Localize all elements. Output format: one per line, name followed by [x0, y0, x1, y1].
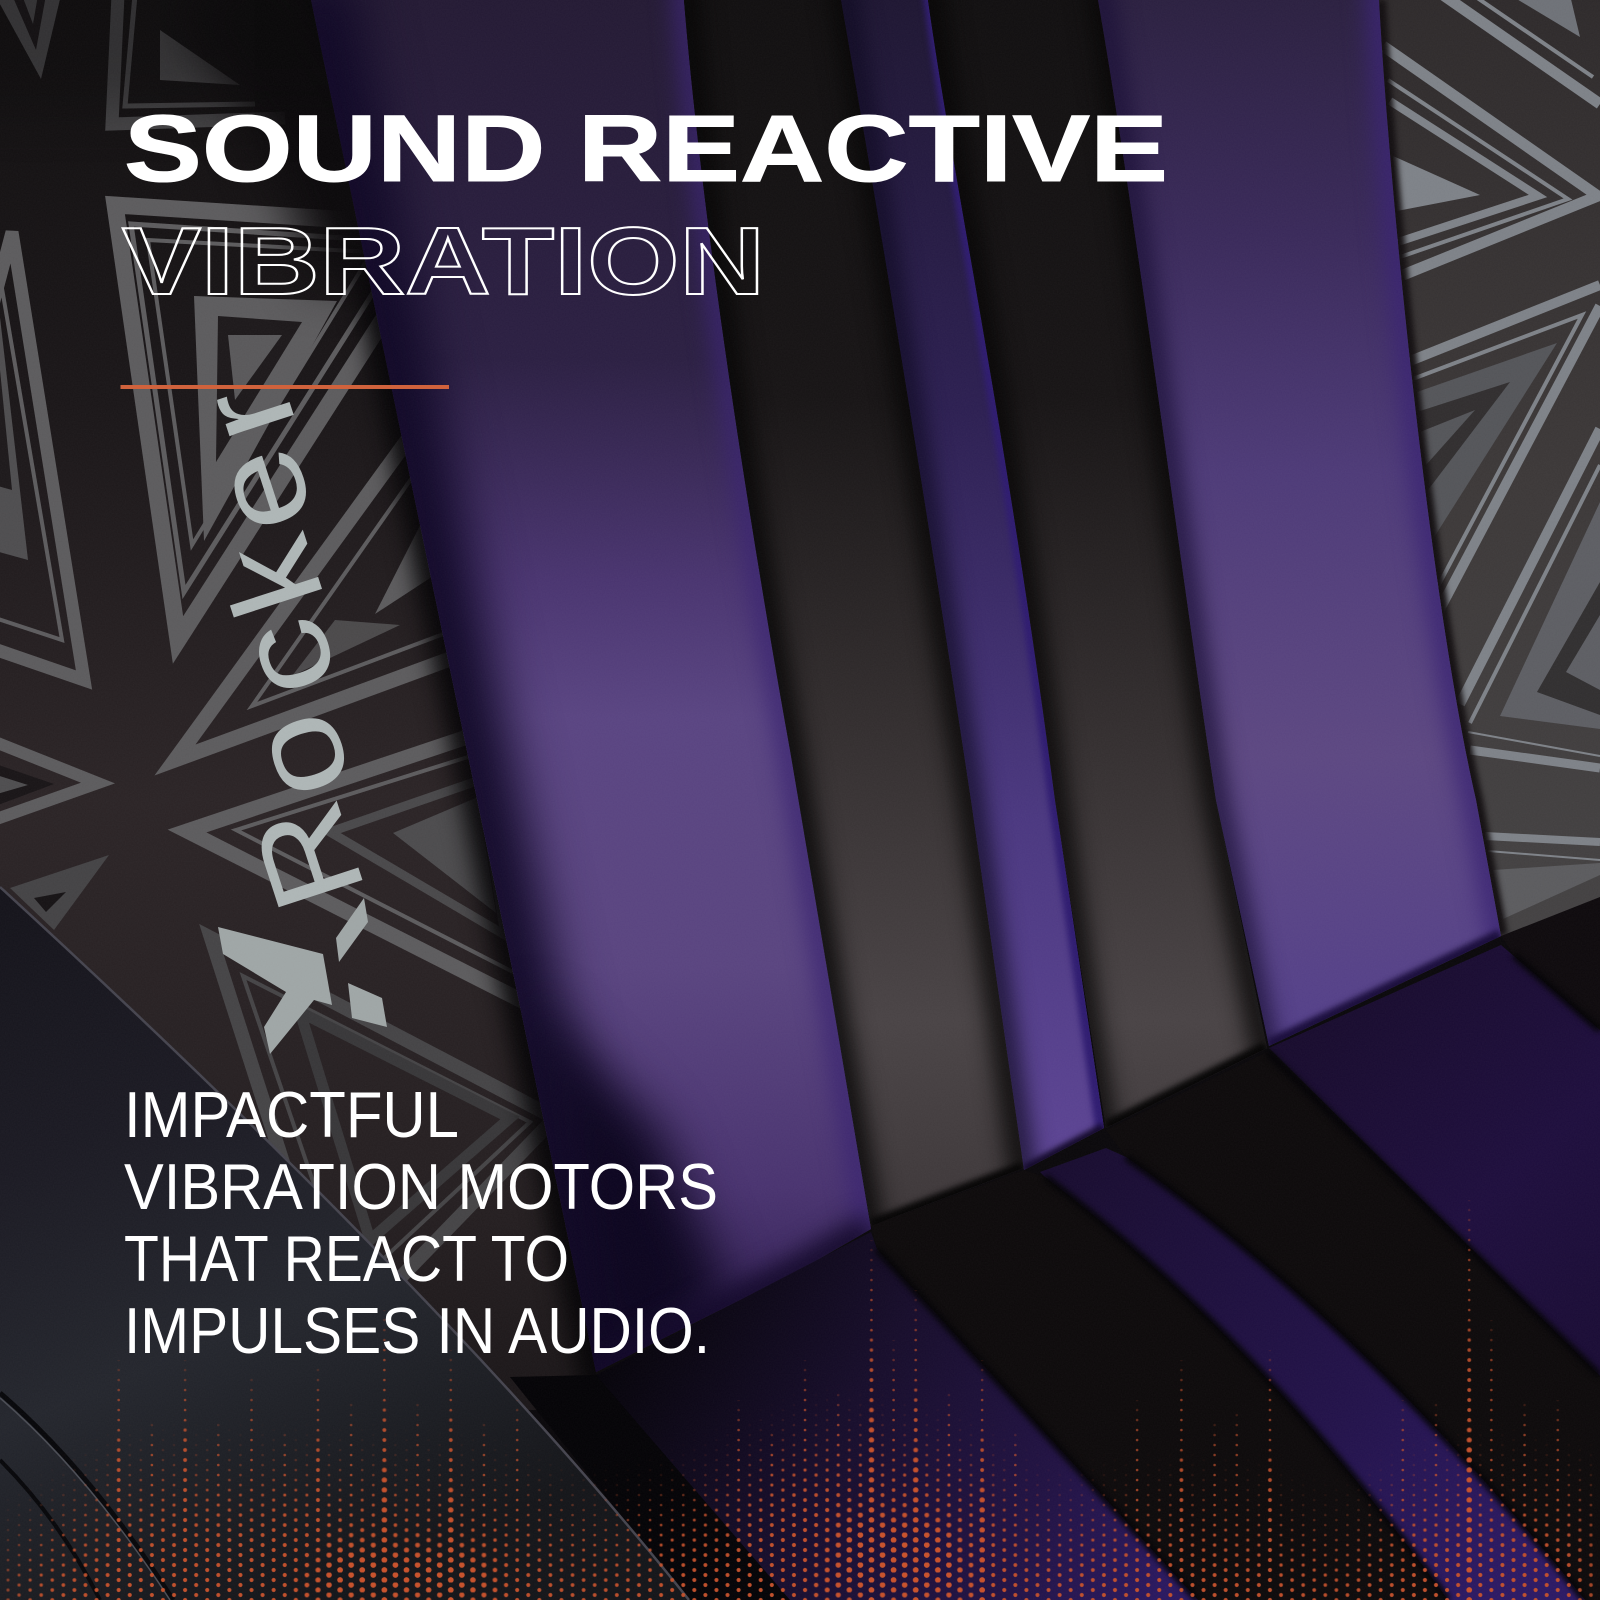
halftone: orange dot sound wave: [0, 1200, 1600, 1600]
title: sound reactive: SOUND REACTIVE: [124, 96, 1168, 202]
divider: orange rule: [120, 385, 449, 389]
panel: foreground arm rest: [0, 887, 689, 1600]
pattern: grey chevrons on right fabric: [1383, 0, 1600, 919]
text block: description: THAT REACT TO: [124, 1222, 569, 1295]
icon: X mark: [218, 898, 387, 1054]
text block: description: IMPACTFUL: [124, 1078, 459, 1151]
title: vibration outline: VIBRATION: [122, 208, 765, 315]
shadow: right fabric edge: [1379, 0, 1501, 936]
panel: left patterned fabric: [0, 0, 620, 1420]
panel: center purple strip: [841, 0, 1104, 1170]
panel: right dark back cushion: [920, 0, 1280, 1140]
wordmark: Rocker: o: [219, 696, 379, 818]
panel: right purple back cushion: [1090, 0, 1510, 1060]
wordmark: Rocker: [171, 368, 392, 927]
text block: description: VIBRATION MOTORS: [124, 1150, 718, 1223]
panel: left purple back cushion: [300, 0, 900, 1410]
text block: description: [124, 1078, 718, 1367]
panel: seat cushions: [510, 945, 1600, 1600]
wordmark: Rocker: e: [181, 431, 342, 552]
panel: right patterned fabric: [1370, 0, 1600, 950]
wordmark: Rocker: r: [171, 368, 323, 461]
wordmark: Rocker: c: [207, 602, 365, 716]
wordmark: Rocker: k: [192, 520, 351, 634]
text block: description: IMPULSES IN AUDIO.: [124, 1294, 710, 1367]
logo: X Rocker printed on fabric: [171, 368, 392, 1054]
panel: left dark back cushion: [680, 0, 1040, 1240]
panel: far right seat corner: [1501, 897, 1600, 1030]
pattern: grey triangles on left fabric: [0, 0, 555, 1340]
wordmark: Rocker: R: [224, 786, 392, 927]
shadow: fabric edge and crease: [344, 238, 596, 1376]
